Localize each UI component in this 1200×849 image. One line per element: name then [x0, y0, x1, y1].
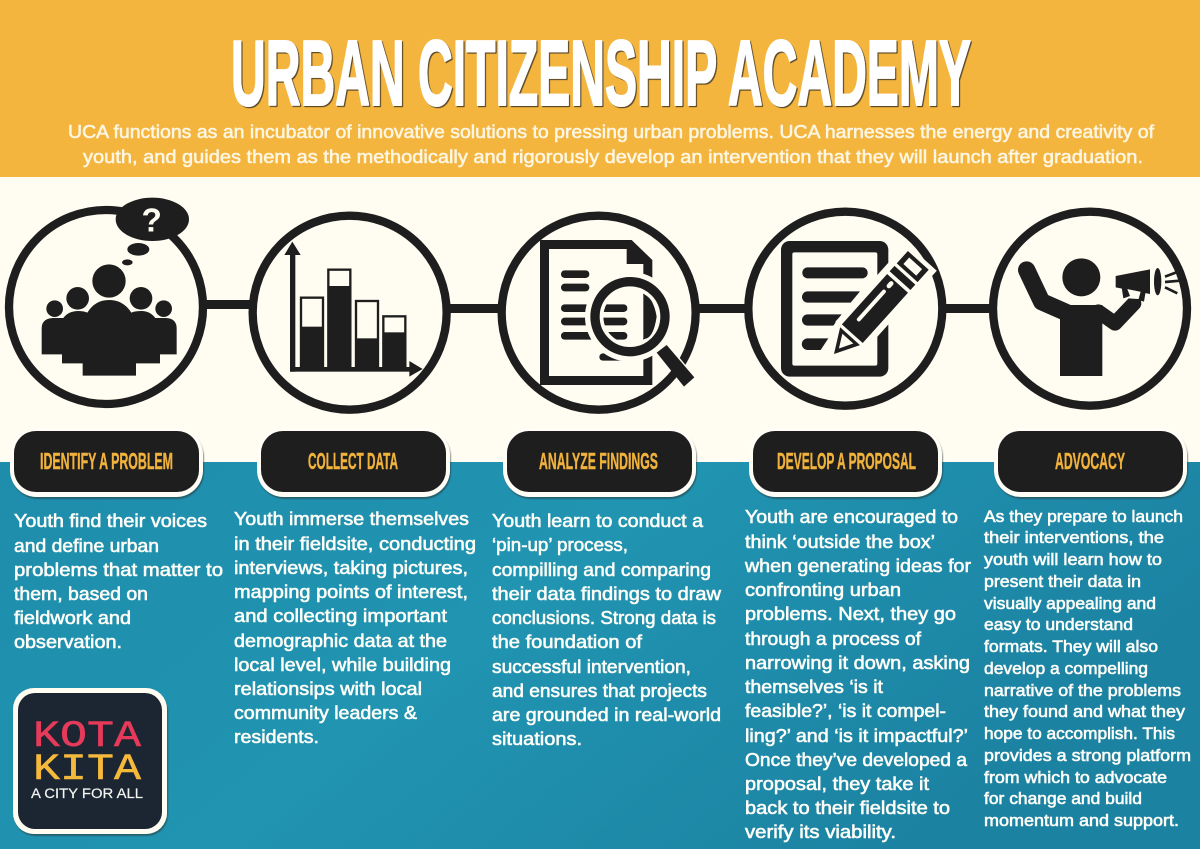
text: develop a proposal: ling?’ and ‘is it impactful?’ — [745, 725, 968, 746]
text: analyze findings: conclusions. Strong data is — [492, 607, 716, 628]
text: advocacy: develop a compelling — [984, 659, 1148, 678]
step label: identify a problem: IDENTIFY A PROBLEM — [40, 448, 173, 474]
background: cream middle band — [0, 177, 1200, 467]
intro text: youth, and guides them as the methodically and rigorously develop an intervention that they will launch after graduation. — [83, 146, 1143, 167]
step label: advocacy — [994, 428, 1187, 497]
step label: develop a proposal — [749, 428, 942, 497]
text: advocacy: present their data in — [984, 572, 1141, 591]
text: analyze findings: are grounded in real-world — [492, 704, 721, 725]
step label: collect data: COLLECT DATA — [308, 448, 398, 474]
text: collect data — [234, 508, 476, 747]
text: collect data: and collecting important — [234, 605, 448, 626]
connector lines between steps — [205, 300, 993, 313]
text: identify a problem — [14, 510, 223, 652]
step label: develop a proposal: DEVELOP A PROPOSAL — [777, 448, 916, 474]
text: develop a proposal: Youth are encouraged to — [745, 506, 958, 527]
icon: bar chart — [284, 242, 423, 377]
text: advocacy: provides a strong platform — [984, 746, 1191, 765]
step label: collect data — [257, 428, 450, 497]
icon: megaphone — [1116, 268, 1180, 302]
text: collect data: residents. — [234, 726, 319, 747]
text: advocacy: youth will learn how to — [984, 550, 1162, 569]
text: develop a proposal — [744, 506, 971, 842]
text: identify a problem: fieldwork and — [14, 607, 131, 628]
text: advocacy: their interventions, the — [984, 528, 1164, 547]
icon: magnifying glass — [585, 272, 695, 387]
text: identify a problem: them, based on — [14, 583, 148, 604]
icon: person — [1027, 258, 1134, 376]
text: develop a proposal: verify its viability. — [745, 821, 896, 842]
icon: notepad — [781, 241, 888, 377]
step 4 circle: notepad with pencil — [748, 212, 942, 406]
text: analyze findings: situations. — [492, 728, 582, 749]
step 3 circle: document with magnifier — [502, 216, 696, 410]
logo: Kota Kita: KITA — [33, 749, 142, 791]
text: develop a proposal: feasible?’, ‘is it compel- — [745, 700, 946, 721]
intro text: UCA functions as an incubator of innovative solutions to pressing urban problems. UCA harnesses the energy and creativity of — [68, 121, 1155, 142]
text: advocacy: narrative of the problems — [984, 681, 1181, 700]
text: identify a problem: observation. — [14, 631, 122, 652]
text: develop a proposal: problems. Next, they go — [745, 603, 956, 624]
icon: thought bubble with question mark — [116, 198, 189, 265]
step 5 circle: person with megaphone — [993, 212, 1187, 406]
text: advocacy: from which to advocate — [984, 768, 1167, 787]
text: advocacy: for change and build — [984, 789, 1142, 808]
text: develop a proposal: through a process of — [745, 628, 922, 649]
text: analyze findings: ‘pin-up’ process, — [492, 534, 628, 555]
text: analyze findings: their data findings to draw — [492, 583, 722, 604]
text: develop a proposal: narrowing it down, asking — [745, 652, 970, 673]
logo: Kota Kita — [13, 688, 167, 834]
text: develop a proposal: when generating ideas for — [744, 555, 971, 576]
text: collect data: interviews, taking pictures, — [234, 557, 468, 578]
text: develop a proposal: proposal, they take it — [745, 773, 930, 794]
step label: analyze findings — [503, 428, 696, 497]
text: analyze findings: successful intervention, — [492, 656, 691, 677]
icon: document — [540, 240, 652, 385]
text: analyze findings: the foundation of — [492, 631, 643, 652]
logo: Kota Kita: A CITY FOR ALL — [31, 786, 144, 801]
text: develop a proposal: think ‘outside the box’ — [745, 531, 935, 552]
text: identify a problem: problems that matter to — [14, 559, 223, 580]
text: develop a proposal: Once they’ve developed a — [745, 749, 968, 770]
intro text — [68, 121, 1155, 167]
text: collect data: community leaders & — [234, 702, 418, 723]
text: analyze findings: compilling and comparing — [492, 559, 711, 580]
text: advocacy: visually appealing and — [984, 594, 1156, 613]
text: advocacy: easy to understand — [984, 615, 1133, 634]
text: advocacy: momentum and support. — [984, 811, 1179, 830]
step 1 circle: group with question — [9, 198, 203, 404]
logo: Kota Kita: KOTA — [33, 716, 142, 758]
icon: thought bubble with question mark: ? — [141, 202, 162, 239]
step label: analyze findings: ANALYZE FINDINGS — [539, 448, 658, 474]
text: collect data: demographic data at the — [234, 630, 447, 651]
icon: group of people — [42, 264, 177, 376]
text: collect data: in their fieldsite, conducting — [234, 533, 476, 554]
text: collect data: local level, while building — [234, 654, 451, 675]
text: advocacy: they found and what they — [984, 702, 1186, 721]
step 2 circle: bar chart — [253, 216, 447, 410]
header band — [0, 0, 1200, 177]
text: advocacy: As they prepare to launch — [984, 507, 1183, 526]
text: analyze findings — [492, 510, 722, 749]
text: analyze findings: and ensures that projects — [492, 680, 707, 701]
text: advocacy: formats. They will also — [984, 637, 1158, 656]
text: advocacy: hope to accomplish. This — [984, 724, 1175, 743]
text: identify a problem: and define urban — [14, 535, 159, 556]
text: identify a problem: Youth find their voices — [14, 510, 207, 531]
step label: advocacy: ADVOCACY — [1055, 448, 1125, 474]
text: advocacy — [984, 507, 1191, 830]
text: analyze findings: Youth learn to conduct a — [492, 510, 704, 531]
background: teal lower band — [0, 462, 1200, 849]
text: collect data: mapping points of interest, — [234, 581, 468, 602]
step label: identify a problem — [10, 428, 203, 497]
text: develop a proposal: back to their fieldsite to — [745, 797, 950, 818]
icon: pencil — [816, 243, 937, 371]
text: develop a proposal: confronting urban — [745, 579, 901, 600]
text: develop a proposal: themselves ‘is it — [745, 676, 884, 697]
text: collect data: relationsips with local — [234, 678, 422, 699]
text: collect data: Youth immerse themselves — [234, 508, 469, 529]
